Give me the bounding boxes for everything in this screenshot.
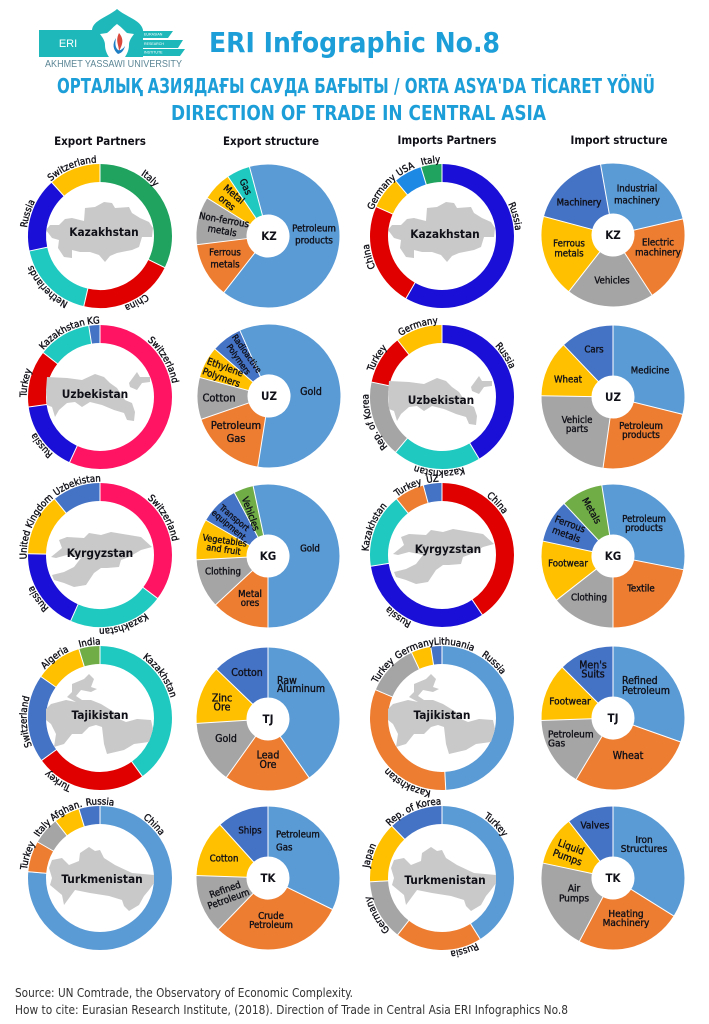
segment labels: Suits <box>581 668 605 680</box>
segment labels: Textile <box>626 584 655 594</box>
country name: Uzbekistan <box>62 387 128 401</box>
chart: Turkmenistan import partners <box>362 799 514 958</box>
partner labels: Russia <box>20 200 35 228</box>
pie segments <box>195 646 334 785</box>
segment labels: Cotton <box>210 854 238 864</box>
ring segments <box>358 634 526 802</box>
country name: Kyrgyzstan <box>67 546 133 560</box>
partner labels: Switzerland <box>47 155 96 181</box>
segment labels: Vehicles <box>239 496 261 533</box>
chart: Kyrgyzstan import partners <box>361 474 514 628</box>
segment labels: Iron <box>635 835 653 846</box>
segment labels: products <box>622 430 660 441</box>
partner labels: Algeria <box>41 647 69 670</box>
partner labels: Germany <box>363 895 392 935</box>
segment labels: Heating <box>608 909 644 920</box>
segment labels: and fruit <box>206 543 241 558</box>
chart: Kazakhstan export structure <box>196 165 336 301</box>
segment labels: Machinery <box>603 918 650 929</box>
ring segments <box>11 466 189 644</box>
chart: Uzbekistan import structure <box>540 324 684 469</box>
partner labels: Russia <box>450 940 480 959</box>
segment labels <box>548 496 666 604</box>
segment labels: metals <box>550 525 582 546</box>
segment labels: Valves <box>581 820 610 832</box>
map: Uzbekistan <box>46 372 150 421</box>
chart: Uzbekistan export partners <box>19 316 180 469</box>
segment labels <box>203 826 320 931</box>
partner labels: Russia <box>386 606 412 628</box>
country name: Tajikistan <box>414 708 470 722</box>
partner labels: UZ <box>426 474 439 483</box>
partner labels: Russia <box>508 202 522 230</box>
segment labels: Cars <box>584 344 604 356</box>
center code: TK <box>260 871 277 885</box>
map: Tajikistan <box>388 674 495 754</box>
segment labels: Transport <box>216 503 251 534</box>
segment labels: Pumps <box>551 848 583 869</box>
partner labels: Russia <box>495 342 514 369</box>
segment labels: Petroleum <box>619 421 663 432</box>
segment labels: Ferrous <box>553 514 587 536</box>
segment labels: Metals <box>579 496 603 526</box>
country name: Turkmenistan <box>61 872 143 886</box>
ring segments <box>353 147 531 325</box>
center code: KZ <box>605 228 621 242</box>
partner labels: Russia <box>29 586 49 612</box>
segment labels: machinery <box>635 248 681 258</box>
chart: Turkmenistan export structure <box>195 805 334 944</box>
pie segments <box>542 484 685 629</box>
segment labels: Petroleum <box>548 730 594 740</box>
partner labels: Russia <box>32 432 53 459</box>
segment labels: Electric <box>642 238 674 248</box>
pie segments <box>542 163 684 300</box>
segment labels: Men's <box>579 660 607 672</box>
chart: Tajikistan import structure <box>540 645 682 784</box>
chart: Uzbekistan import partners <box>362 318 514 478</box>
logo: Eurasian Research Institute: ERI <box>59 38 77 50</box>
partner labels <box>19 316 180 459</box>
column heading: export structure: Export structure <box>223 134 319 148</box>
center code: KG <box>605 549 621 563</box>
segment labels: Industrial <box>617 184 657 194</box>
segment labels: Vehicle <box>562 415 592 426</box>
partner labels: China <box>141 812 167 838</box>
partner labels: Turkey <box>19 840 38 871</box>
segment labels: metals <box>554 248 584 260</box>
segment labels: Footwear <box>549 696 591 708</box>
segment labels: Non-ferrous <box>198 211 250 230</box>
pie segments <box>540 645 682 784</box>
country name: Kyrgyzstan <box>415 542 481 556</box>
segment labels: parts <box>566 424 589 435</box>
chart: Kazakhstan import partners <box>364 156 522 308</box>
map: Turkmenistan <box>391 847 496 911</box>
chart: Tajikistan import partners <box>370 637 514 798</box>
segment labels: Ethylene <box>205 356 245 379</box>
partner labels: Switzerland <box>19 696 32 748</box>
map: Kazakhstan <box>388 202 495 262</box>
segment labels: Petroleum <box>622 685 670 697</box>
segment labels <box>551 820 668 929</box>
partner labels: Italy <box>420 156 440 166</box>
map: Tajikistan <box>46 674 153 754</box>
chart: Kyrgyzstan import structure <box>542 484 685 629</box>
map: Uzbekistan <box>388 376 492 425</box>
segment labels: Machinery <box>557 198 601 208</box>
country name: Kazakhstan <box>410 227 480 241</box>
partner labels: KG <box>87 316 100 325</box>
segment labels: Wheat <box>613 750 644 762</box>
partner labels: Turkey <box>392 479 420 496</box>
segment labels: Metal <box>221 183 246 207</box>
source note: Source: UN Comtrade, the Observatory of Economic Complexity. <box>15 986 353 1000</box>
logo: Eurasian Research Institute: AKHMET YASSAWI UNIVERSITY <box>45 58 182 70</box>
map: Kazakhstan <box>46 202 153 262</box>
partner labels: Russia <box>482 650 505 674</box>
partner labels: Netherlands <box>28 266 68 308</box>
segment labels: Polymers <box>224 343 252 377</box>
country name: Turkmenistan <box>404 873 486 887</box>
segment labels: Refined <box>208 880 242 901</box>
citation note: How to cite: Eurasian Research Institute, (2018). Direction of Trade in Central Asia ERI Infographics No.8 <box>15 1003 568 1017</box>
segment labels: Petroleum <box>292 224 336 234</box>
segment labels: Petroleum <box>622 514 666 525</box>
segment labels <box>553 184 681 286</box>
partner labels <box>362 318 514 478</box>
segment labels: Crude <box>258 911 284 922</box>
segment labels: Polymers <box>201 366 242 390</box>
partner labels: Italy <box>141 169 159 186</box>
segment labels: Gas <box>276 842 293 854</box>
ring segments <box>353 308 531 486</box>
partner labels: India <box>78 637 100 648</box>
country name: Tajikistan <box>72 708 128 722</box>
chart: Kazakhstan export partners <box>20 155 172 310</box>
segment labels <box>212 667 325 771</box>
partner labels: Russia <box>85 796 115 809</box>
pie segments <box>195 485 334 629</box>
center code: TJ <box>608 711 618 725</box>
segment labels: Wheat <box>554 374 583 386</box>
segment labels: Clothing <box>205 566 241 578</box>
segment labels: Gas <box>227 432 245 445</box>
segment labels: Gas <box>237 177 254 197</box>
ring segments <box>11 147 189 325</box>
segment labels: Gas <box>548 738 565 750</box>
segment labels <box>554 344 669 441</box>
pie segments <box>542 805 678 943</box>
segment labels: Gold <box>300 544 320 554</box>
subtitle: English: DIRECTION OF TRADE IN CENTRAL ASIA <box>171 101 547 125</box>
segment labels: Petroleum <box>206 887 251 912</box>
segment labels: Ore <box>260 759 277 771</box>
center code: TJ <box>263 712 273 726</box>
segment labels <box>548 660 670 762</box>
partner labels <box>370 637 505 798</box>
partner labels: Italy <box>32 817 53 839</box>
ring segments <box>353 789 531 967</box>
ring segments <box>12 630 188 806</box>
segment labels: Medicine <box>631 366 669 376</box>
country name: Kazakhstan <box>69 225 139 239</box>
segment labels: Cotton <box>202 392 236 404</box>
partner labels: Turkey <box>366 344 387 370</box>
logo: Eurasian Research Institute: EURASIAN <box>144 32 163 36</box>
partner labels: Switzerland <box>148 336 180 383</box>
map: Kyrgyzstan <box>51 532 152 587</box>
partner labels: Kazakhstan <box>414 466 465 478</box>
chart: Kyrgyzstan export structure <box>195 485 334 629</box>
partner labels: Kazakhstan <box>385 768 430 798</box>
pie segments <box>198 329 335 468</box>
partner labels: Turkey <box>44 770 70 792</box>
ring segments <box>12 309 188 485</box>
chart: Uzbekistan export structure <box>198 329 335 468</box>
segment labels: products <box>625 523 663 534</box>
chart: Kazakhstan import structure <box>542 163 684 300</box>
segment labels: ores <box>216 193 237 214</box>
center code: UZ <box>605 390 621 404</box>
logo: Eurasian Research Institute: RESEARCH <box>144 42 164 46</box>
center code: KZ <box>261 229 277 243</box>
segment labels: Pumps <box>559 894 589 904</box>
partner labels: Germany <box>395 640 434 658</box>
column heading: import structure: Import structure <box>571 133 667 147</box>
partner labels: Turkey <box>19 368 33 398</box>
pie segments <box>195 805 334 944</box>
ring segments <box>353 466 531 644</box>
logo: Eurasian Research Institute <box>39 9 185 70</box>
partner labels: China <box>364 244 375 270</box>
segment labels: machinery <box>614 196 660 206</box>
segment labels: Footwear <box>548 558 588 570</box>
segment labels: Petroleum <box>276 830 320 840</box>
segment labels: Vehicles <box>594 276 630 286</box>
chart: Tajikistan export structure <box>195 646 334 785</box>
chart: Kyrgyzstan export partners <box>19 476 180 634</box>
map: Kyrgyzstan <box>393 529 494 584</box>
segment labels: Liquid <box>556 838 586 858</box>
partner labels: Rep. of Korea <box>384 796 441 829</box>
segment labels: Raw <box>277 675 297 687</box>
partner labels: Rep. of Korea <box>362 394 388 451</box>
segment labels: Structures <box>621 844 668 855</box>
partner labels: Afghan. <box>48 799 83 824</box>
segment labels: Petroleum <box>249 920 293 931</box>
chart: Turkmenistan export partners <box>20 797 172 950</box>
segment labels: Metal <box>238 589 262 600</box>
segment labels: Cotton <box>231 667 263 679</box>
chart: Turkmenistan import structure <box>542 805 678 943</box>
segment labels: Air <box>568 884 580 894</box>
pie segments <box>196 165 333 301</box>
pie segments <box>540 324 684 469</box>
chart: Tajikistan export partners <box>19 637 176 792</box>
partner labels: Turkey <box>481 810 510 839</box>
partner labels: China <box>488 492 507 514</box>
segment labels: Gold <box>215 733 237 745</box>
partner labels: Kazakhstan <box>361 504 387 551</box>
map: Turkmenistan <box>49 847 154 911</box>
segment labels: Ships <box>238 826 262 836</box>
segment labels: Zinc <box>212 692 232 704</box>
partner labels: USA <box>396 162 415 176</box>
segment labels: Refined <box>622 675 658 687</box>
partner labels <box>19 637 176 792</box>
segment labels: Lead <box>257 750 279 762</box>
segment labels: products <box>295 236 333 246</box>
partner labels <box>361 474 507 628</box>
segment labels: Vegetables <box>202 533 247 550</box>
partner labels: Switzerland <box>148 494 180 541</box>
partner labels: United Kingdom <box>19 495 54 559</box>
partner labels: Germany <box>398 318 438 335</box>
partner labels: Turkey <box>370 658 394 682</box>
column heading: export partners: Export Partners <box>54 134 146 148</box>
partner labels: Germany <box>368 174 396 209</box>
segment labels: metals <box>210 260 240 270</box>
title: ERI Infographic No.8 <box>209 27 500 59</box>
segment labels: Aluminum <box>277 683 325 695</box>
logo: Eurasian Research Institute: INSTITUTE <box>144 50 163 54</box>
partner labels: Japan <box>361 842 379 869</box>
column heading: imports partners: Imports Partners <box>398 133 496 147</box>
segment labels: Radioactive <box>229 333 263 376</box>
partner labels <box>19 476 180 634</box>
segment labels: Ferrous <box>209 248 241 258</box>
segment labels <box>201 333 322 445</box>
segment labels: ores <box>241 598 260 609</box>
partner labels: Uzbekistan <box>52 476 100 495</box>
center code: TK <box>605 871 622 885</box>
country name: Uzbekistan <box>408 393 474 407</box>
partner labels <box>20 155 159 310</box>
segment labels: Ferrous <box>553 238 585 250</box>
partner labels <box>362 799 508 958</box>
center code: KG <box>260 549 276 563</box>
partner labels: Kazakhstan <box>38 320 85 350</box>
segment labels <box>201 496 320 609</box>
partner labels <box>364 156 522 270</box>
segment labels: Gold <box>300 386 322 398</box>
partner labels: Lithuania <box>434 637 474 652</box>
center code: UZ <box>261 389 277 403</box>
partner labels: Kazakhstan <box>100 613 149 634</box>
partner labels <box>20 797 164 870</box>
partner labels: Kazakhstan <box>143 652 176 698</box>
ring segments <box>12 790 188 966</box>
segment labels: Petroleum <box>211 419 261 432</box>
segment labels: Ore <box>214 702 231 714</box>
segment labels <box>196 177 336 270</box>
segment labels: Clothing <box>571 592 607 604</box>
partner labels: China <box>124 294 148 310</box>
segment labels: metals <box>207 223 238 239</box>
segment labels: equipment <box>209 508 247 543</box>
